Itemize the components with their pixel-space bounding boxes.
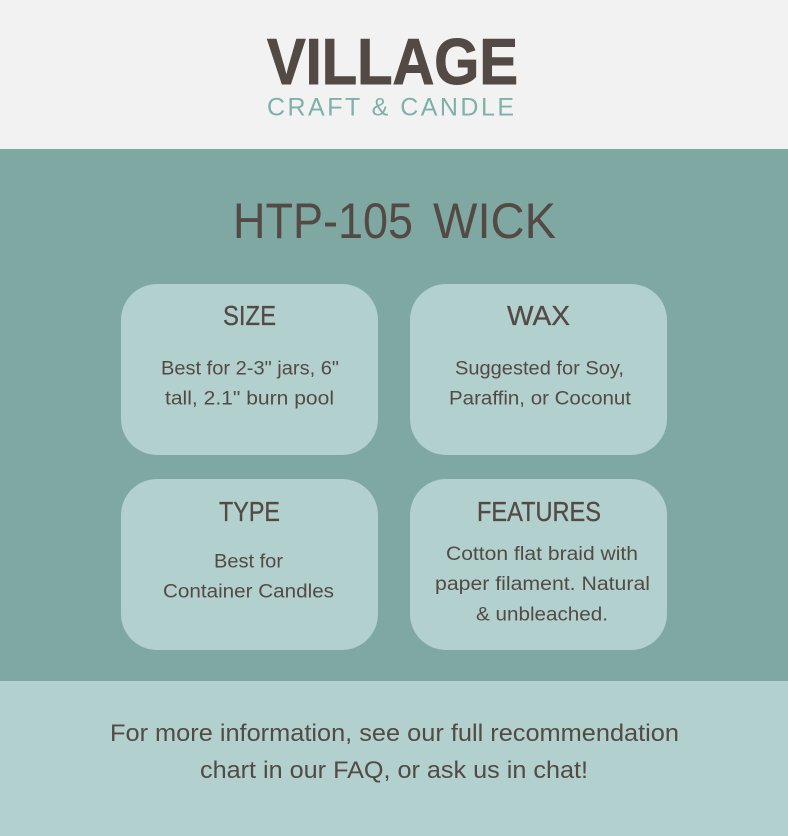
panel: size: Best for 2-3" jars, 6" bbox=[161, 358, 339, 380]
panel: features: & unbleached. bbox=[476, 604, 608, 626]
title: HTP-105 bbox=[233, 193, 413, 249]
logo: VILLAGE bbox=[267, 25, 518, 98]
panel: type: TYPE bbox=[219, 496, 280, 527]
logo: CRAFT & CANDLE bbox=[267, 94, 514, 122]
footer text: chart in our FAQ, or ask us in chat! bbox=[200, 757, 588, 784]
panel: wax: Suggested for Soy, bbox=[455, 358, 624, 380]
panel: wax: Paraffin, or Coconut bbox=[449, 388, 632, 410]
footer text bbox=[110, 720, 679, 784]
panel: size: SIZE bbox=[223, 300, 276, 331]
footer text: For more information, see our full recommendation bbox=[110, 720, 679, 747]
panel: features: Cotton flat braid with bbox=[446, 544, 638, 565]
panel: features: paper filament. Natural bbox=[435, 574, 650, 595]
main teal panel bbox=[0, 149, 788, 681]
panel: size: tall, 2.1" burn pool bbox=[165, 388, 334, 410]
title bbox=[233, 193, 556, 249]
panel: type: Best for bbox=[214, 552, 284, 572]
footer band bbox=[0, 681, 788, 836]
panel: wax bbox=[410, 284, 667, 455]
panel: wax: WAX bbox=[507, 300, 570, 331]
panel: size bbox=[121, 284, 378, 455]
panel: type bbox=[121, 479, 378, 650]
title: WICK bbox=[433, 193, 556, 249]
panel: features bbox=[410, 479, 667, 650]
logo bbox=[267, 25, 518, 122]
panel: features: FEATURES bbox=[477, 496, 601, 527]
panel: type: Container Candles bbox=[163, 582, 334, 602]
header band bbox=[0, 0, 788, 149]
